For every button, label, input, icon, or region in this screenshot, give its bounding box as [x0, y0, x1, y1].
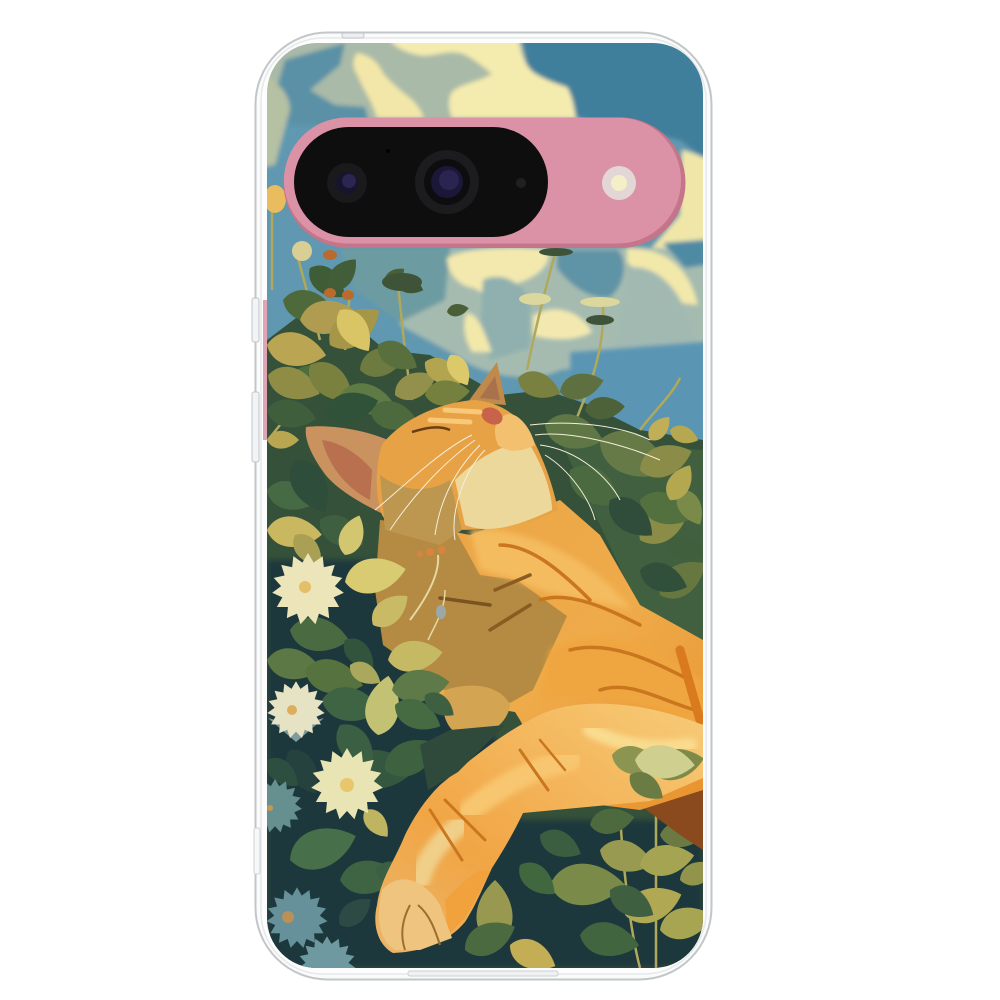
middle cloud grey [400, 248, 725, 377]
daisies [248, 185, 384, 994]
camera window [294, 127, 548, 237]
top right deep blue [520, 43, 703, 158]
clear case outer shell [256, 32, 712, 980]
cheek shadow [380, 475, 462, 545]
right side leaves [518, 371, 703, 598]
lower-right leaves [465, 808, 703, 968]
sensor [516, 178, 526, 188]
leaf cluster over leg [609, 741, 707, 807]
belly highlights [466, 529, 700, 722]
left ear [306, 426, 388, 515]
paw pale toes [379, 879, 452, 950]
lens small [327, 163, 367, 203]
foliage [260, 210, 721, 978]
lower-left leaves [267, 618, 428, 927]
blue daisy bottom [266, 887, 328, 949]
yellow bud top-left [264, 185, 286, 213]
daisy top [271, 553, 345, 626]
upper-left leaves [263, 252, 476, 573]
muzzle [495, 414, 535, 451]
leaves overlapping cat's left side [334, 511, 505, 790]
white chin and chest [455, 444, 552, 529]
cat [306, 362, 703, 953]
small plant over cat chest [410, 546, 446, 640]
cream patches [464, 313, 492, 352]
cream cloud left [353, 53, 424, 118]
cat stripes [440, 545, 700, 720]
upper cloud mass [269, 43, 581, 118]
resting paw [444, 686, 510, 730]
tall flower stems [268, 210, 680, 968]
blue daisy left [248, 779, 302, 834]
nose [482, 407, 502, 425]
cream cloud middle [447, 248, 549, 293]
phone case product illustration [252, 32, 712, 980]
head [377, 400, 558, 532]
blue daisy bottom edge [298, 936, 356, 994]
pale flower head [292, 241, 312, 261]
paw orange shading [445, 870, 490, 935]
dark umbels [382, 248, 614, 325]
cream cloud centre [388, 43, 580, 118]
orange berries [323, 250, 354, 300]
sky [267, 43, 703, 440]
upper-left blue swirl [272, 43, 370, 125]
camera bar [284, 118, 686, 248]
paw toe lines [402, 905, 440, 950]
whiskers [375, 423, 660, 540]
front leg [375, 704, 703, 953]
leg highlights and stripes [420, 730, 690, 880]
cloud blue pockets [557, 250, 624, 297]
closed eye [412, 427, 450, 432]
right ear [468, 362, 506, 405]
forehead stripes [430, 410, 480, 422]
small umbel heads [519, 293, 620, 307]
sensor dot [386, 149, 390, 153]
daisy middle [267, 681, 325, 742]
tucked hind body at right [644, 790, 703, 850]
lower-right blue [568, 340, 703, 380]
cat body [438, 500, 703, 810]
lens large [415, 150, 479, 214]
daisy lower [310, 748, 384, 821]
case side buttons and pink edge [252, 33, 558, 976]
brown shaded chest [375, 520, 567, 703]
flash [602, 166, 636, 200]
cream behind pill right [650, 147, 703, 252]
printed artwork [267, 43, 703, 968]
grey cloud towers [480, 277, 530, 360]
